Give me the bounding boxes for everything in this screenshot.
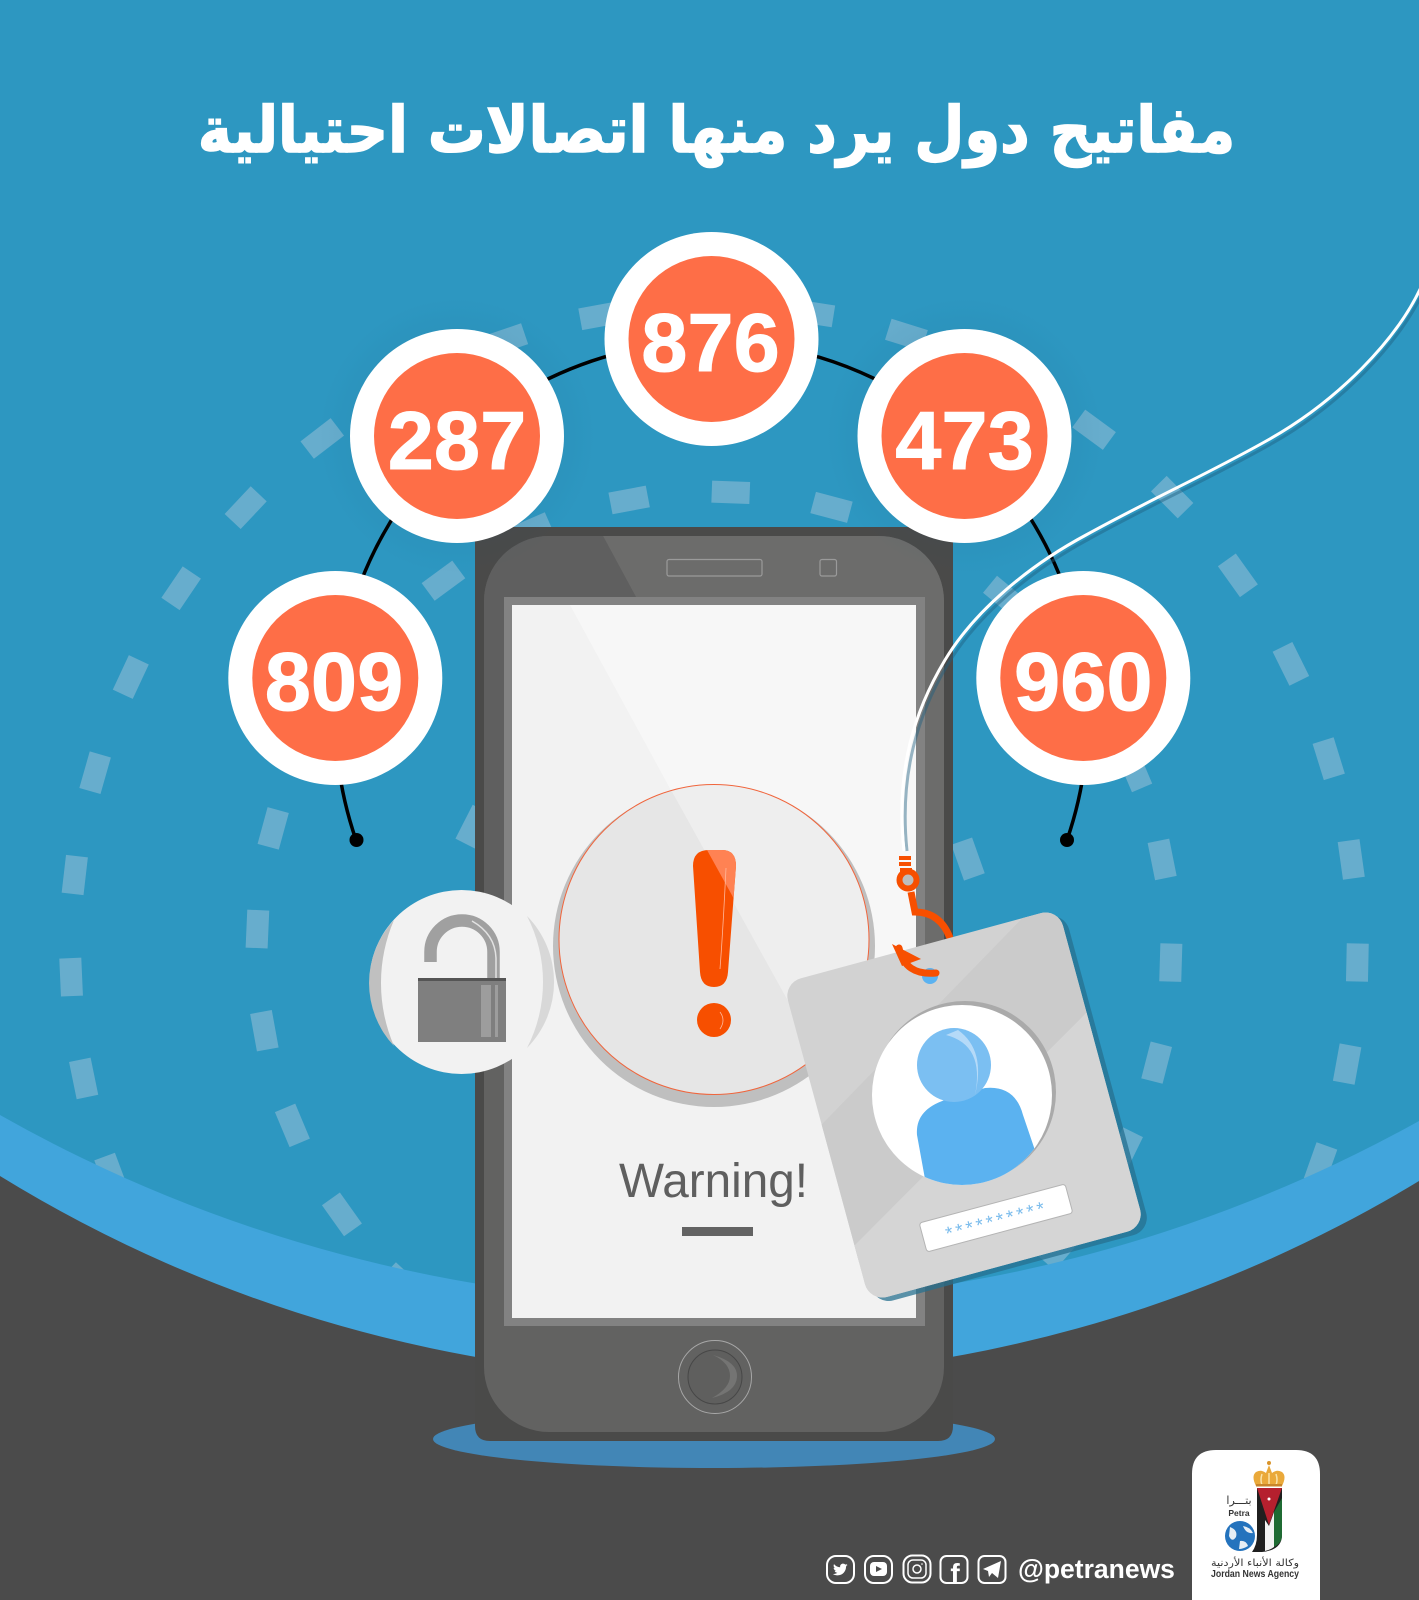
warning disc: [553, 784, 875, 1107]
agency english name: Jordan News Agency: [1211, 1568, 1299, 1580]
petra latin: Petra: [1228, 1508, 1250, 1518]
speaker: [667, 560, 762, 576]
agency arabic name: وكالة الأنباء الأردنية: [1211, 1556, 1299, 1569]
password field: **********: [943, 1198, 1050, 1245]
padlock shackle: [430, 921, 494, 979]
number circle 809: 809: [265, 635, 403, 728]
home button: [678, 1340, 752, 1414]
icon: instagram: [904, 1556, 930, 1582]
number circle 876: 876: [641, 296, 780, 389]
logo card: [1192, 1450, 1320, 1600]
smartphone: [475, 527, 953, 1441]
icon: facebook: [940, 1556, 968, 1589]
petra logotype: بتـــرا: [1226, 1494, 1252, 1507]
password field: [919, 1184, 1073, 1252]
hook upper part: [899, 858, 950, 938]
hook lower part: [892, 944, 936, 973]
number circle 287: 287: [388, 394, 526, 487]
padlock body: [418, 978, 506, 1042]
icon: twitter: [827, 1556, 854, 1583]
number circle 287: [350, 329, 564, 543]
globe: [1225, 1521, 1255, 1551]
circle halos: [319, 298, 1102, 574]
warning label: Warning!: [619, 1155, 808, 1208]
title: مفاتيح دول يرد منها اتصالات احتيالية: [198, 93, 1235, 168]
number circle 473: [858, 329, 1072, 543]
icon: telegram: [978, 1556, 1006, 1583]
screen bezel: [504, 597, 925, 1326]
social handle: @petranews: [1018, 1554, 1175, 1584]
phishing line: [902, 278, 1419, 851]
open padlock badge: [369, 890, 554, 1074]
ID card: [787, 912, 1147, 1301]
phone outer shell: [475, 527, 953, 1441]
warning underline: [682, 1227, 753, 1236]
crown: [1254, 1461, 1284, 1486]
light band shape: [0, 1115, 1419, 1600]
number circle 876: [604, 232, 818, 446]
icon: facebook: f: [950, 1558, 960, 1589]
exclamation mark: [693, 850, 736, 1037]
card hole: [922, 968, 938, 984]
dark ground: [0, 1176, 1419, 1600]
number circle 809: [228, 571, 442, 785]
icon: youtube: [865, 1556, 892, 1583]
avatar: [872, 1001, 1056, 1200]
screen: [512, 605, 916, 1318]
phone ground shadow: [433, 1410, 995, 1468]
card face: [787, 912, 1141, 1298]
Jordan flag J: [1252, 1488, 1282, 1552]
card shadow: [789, 912, 1151, 1305]
connector arc with end dots: [336, 342, 1088, 847]
camera: [820, 560, 836, 576]
number circle 960: [976, 571, 1190, 785]
number circle 473: 473: [895, 394, 1034, 487]
phone body: [484, 536, 944, 1432]
number circle 960: 960: [1014, 635, 1153, 728]
